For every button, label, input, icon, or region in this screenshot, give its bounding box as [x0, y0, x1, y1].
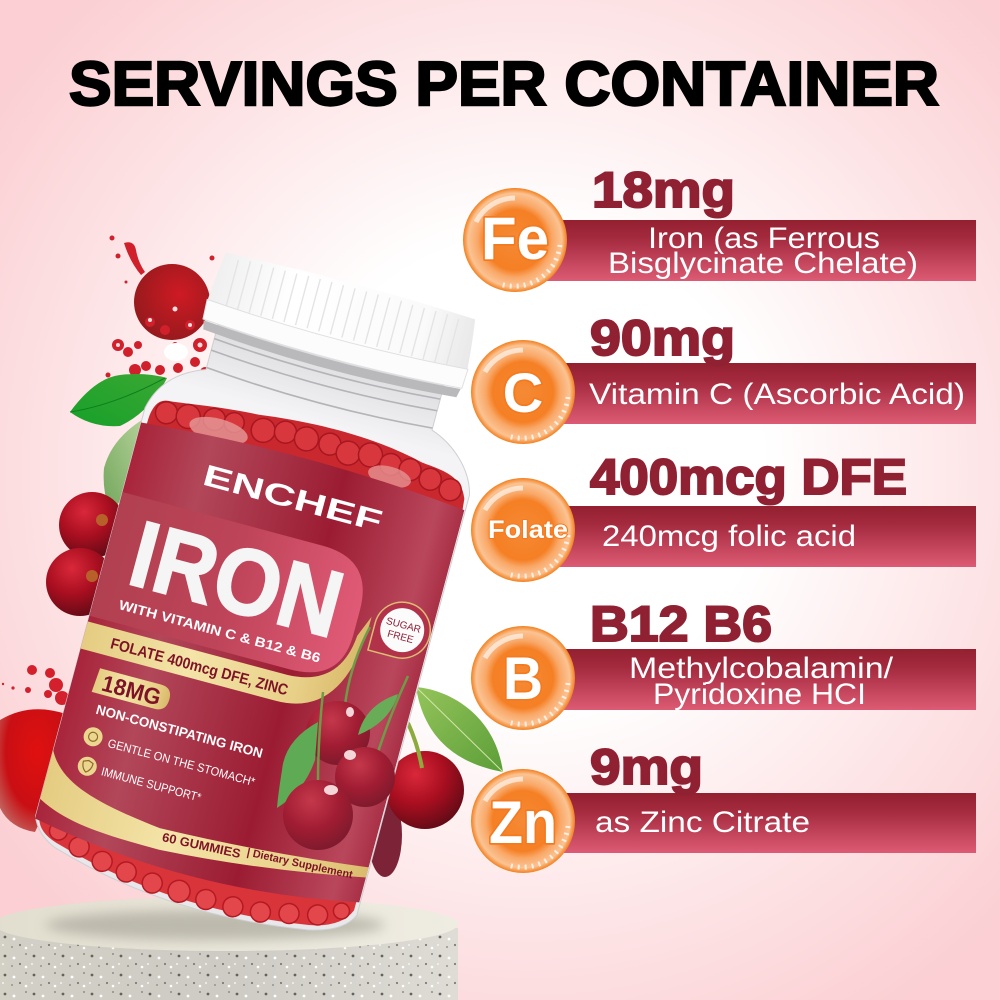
bar: [550, 649, 976, 710]
bar: [550, 363, 976, 424]
nutrient row: vitamin C: [471, 310, 976, 444]
neck threads: [205, 339, 440, 433]
glass jar: [23, 311, 495, 950]
bar: [550, 793, 976, 853]
label: [35, 422, 464, 902]
icon: folate sphere: [471, 478, 575, 582]
white screw cap: [198, 248, 482, 404]
18MG pill: 18MG: [99, 670, 164, 710]
description: 240mcg folic acid: [602, 520, 856, 553]
stone pedestal: [0, 897, 458, 1000]
icon: Zn sphere: [471, 769, 575, 873]
icon: Zn sphere: Zn: [489, 789, 557, 856]
brand logo: ENCHEF: [199, 459, 386, 539]
top gummies: [142, 381, 475, 519]
lower gold ribbon: [40, 750, 368, 878]
left cherries: [46, 492, 125, 616]
claim: gentle on the stomach: [81, 725, 258, 790]
sugar free badge: SUGAR: [385, 616, 422, 636]
count line: 60 GUMMIES: [161, 830, 242, 861]
folate line: FOLATE 400mcg DFE, ZINC: [109, 635, 290, 699]
nutrient row: B vitamins: [471, 596, 976, 730]
icon: Fe sphere: [463, 188, 567, 292]
description line 2: Pyridoxine HCI: [653, 678, 866, 711]
description: Methylcobalamin/: [629, 652, 894, 685]
label cherries: [277, 627, 408, 850]
icon: C sphere: C: [503, 361, 543, 424]
bar: [540, 220, 976, 281]
icon: Fe sphere: Fe: [481, 205, 549, 272]
description: Iron (as Ferrous: [648, 222, 880, 255]
nutrient row: iron: [463, 162, 976, 292]
icon: B sphere: [471, 626, 575, 730]
label title panel: [90, 492, 363, 672]
sugar free badge: [368, 596, 437, 664]
bar: [550, 506, 976, 567]
nutrient row: folate: [471, 449, 976, 582]
light leaf: [104, 418, 145, 512]
description: Vitamin C (Ascorbic Acid): [589, 378, 965, 411]
icon: C sphere: [471, 340, 575, 444]
amount: 400mcg DFE: [590, 449, 907, 505]
supplement bottle: [35, 253, 475, 930]
right cherries and leaf: [368, 687, 503, 877]
amount: 9mg: [590, 739, 703, 795]
claim: gentle on the stomach: GENTLE ON THE STOMACH*: [106, 736, 257, 789]
bottom gummies: [27, 800, 361, 947]
amount: 90mg: [590, 310, 735, 366]
illustration: fruit behind the bottle: [0, 236, 503, 877]
splashing cherry: [106, 236, 214, 378]
description: as Zinc Citrate: [595, 806, 810, 839]
claim: immune support: [76, 755, 204, 806]
sugar free badge: FREE: [386, 629, 415, 646]
subtitle: WITH VITAMIN C & B12 & B6: [117, 597, 323, 666]
lower-left cherry: [0, 665, 69, 832]
amount: 18mg: [592, 162, 735, 218]
claim: immune support: IMMUNE SUPPORT*: [100, 764, 203, 805]
amount: B12 B6: [590, 596, 772, 652]
nutrient row: zinc: [471, 739, 976, 873]
title: SERVINGS PER CONTAINER: [69, 50, 939, 119]
icon: folate sphere: Folate: [488, 516, 568, 544]
green leaf: [70, 374, 167, 426]
description line 2: Bisglycinate Chelate): [608, 247, 918, 280]
product name: IRON: [120, 501, 354, 657]
supplement line: | Dietary Supplement: [246, 847, 354, 881]
upper gold ribbon: [80, 616, 372, 704]
icon: B sphere: B: [503, 645, 543, 712]
claim heading: NON-CONSTIPATING IRON: [94, 702, 264, 761]
